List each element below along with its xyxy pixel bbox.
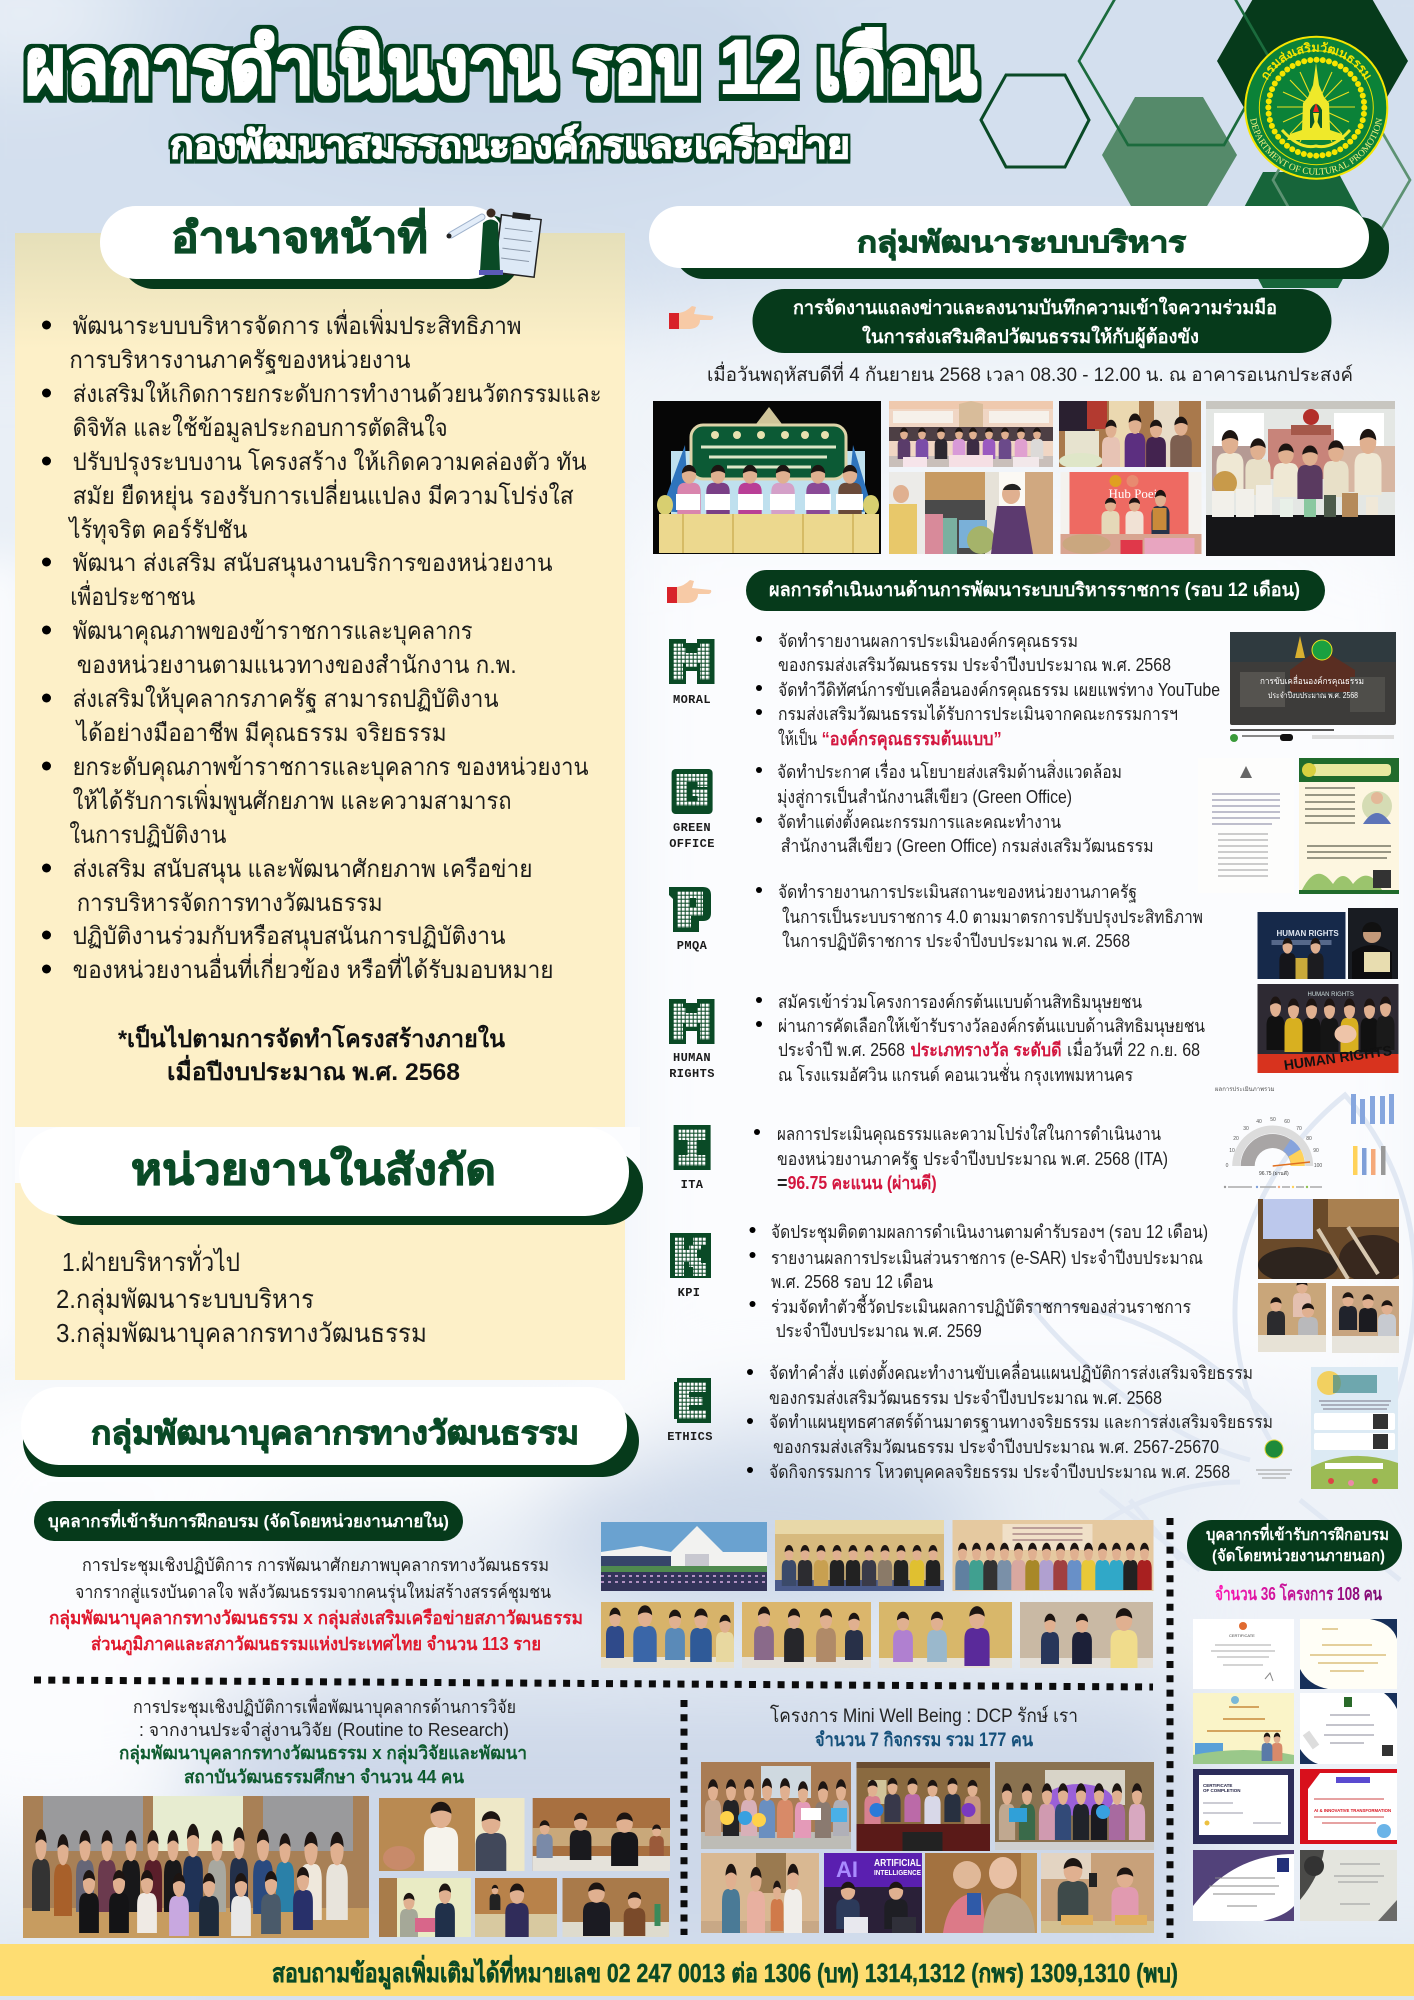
photo: research group portrait — [23, 1796, 369, 1938]
icon: I — [674, 1125, 711, 1170]
text: MORAL items: ให้เป็น — [778, 727, 817, 749]
callout: results heading — [746, 570, 1325, 611]
photo: man and woman at table — [562, 1878, 669, 1937]
note: structure — [118, 1024, 506, 1086]
list: duties: พัฒนาคุณภาพของข้าราชการและบุคลากร — [73, 618, 473, 646]
list: duties: ส่งเสริมให้เกิดการยกระดับการทำงานด้วยนวัตกรรมและ — [73, 380, 602, 408]
section: ETHICS: ETHICS — [667, 1430, 713, 1444]
list: duties: ของหน่วยงานอื่นที่เกี่ยวข้อง หรือที่ได้รับมอบหมาย — [73, 953, 554, 984]
certificate: three — [1193, 1693, 1294, 1764]
callout: MOU heading — [752, 289, 1332, 353]
list: duties: การบริหารงานภาครัฐของหน่วยงาน — [69, 347, 410, 374]
section: MORAL — [669, 631, 1396, 751]
text: mini well being: จำนวน 7 กิจกรรม รวม 177 คน — [815, 1730, 1033, 1751]
photo: mug selfie — [925, 1853, 1037, 1933]
text: human rights items: ผ่านการคัดเลือกให้เข้ารับรางวัลองค์กรต้นแบบด้านสิทธิมนุษยชน — [778, 1015, 1205, 1037]
text: ethics items: จัดทำคำสั่ง แต่งตั้งคณะทำงานขับเคลื่อนแผนปฏิบัติการส่งเสริมจริยธรรม — [769, 1360, 1253, 1383]
text: research workshop — [119, 1694, 527, 1787]
section: GREEN OFFICE: OFFICE — [669, 837, 715, 851]
note: structure: เมื่อปีงบประมาณ พ.ศ. 2568 — [167, 1054, 460, 1086]
certificate: five: CERTIFICATE — [1203, 1783, 1232, 1788]
photo: phone and presenters — [1041, 1853, 1154, 1933]
callout: external training heading — [1187, 1520, 1402, 1571]
text: green items — [777, 759, 1154, 856]
section: HUMAN RIGHTS: RIGHTS — [669, 1067, 715, 1081]
text: research workshop: การประชุมเชิงปฏิบัติการเพื่อพัฒนาบุคลากรด้านการวิจัย — [133, 1694, 516, 1718]
photo: well being standing — [701, 1853, 819, 1933]
photo: speakers — [379, 1798, 524, 1871]
certificate: one: CERTIFICATE — [1229, 1633, 1255, 1638]
photo: certificate holder — [1348, 908, 1398, 979]
icon: E — [674, 1378, 711, 1423]
heading: admin group: กลุ่มพัฒนาระบบบริหาร — [857, 227, 1186, 260]
list: duties: ปฏิบัติงานร่วมกับหรือสนุบสนันการปฏิบัติงาน — [73, 923, 506, 951]
text: ethics items: ของกรมส่งเสริมวัฒนธรรม ประจำปีงบประมาณ พ.ศ. 2567-25670 — [773, 1437, 1219, 1457]
text: KPI items: จัดประชุมติดตามผลการดำเนินงานตามคำรับรองฯ (รอบ 12 เดือน) — [771, 1222, 1208, 1243]
text: MORAL items: “องค์กรคุณธรรมต้นแบบ” — [822, 728, 1002, 751]
section: ETHICS — [667, 1360, 1398, 1489]
chart: gauge: 10 — [1229, 1148, 1235, 1154]
chart: ITA gauge and bars — [1215, 1086, 1394, 1188]
text: internal training description — [49, 1555, 583, 1656]
list: sub-units: 2.กลุ่มพัฒนาระบบบริหาร — [56, 1284, 314, 1315]
icon: pointing hand 2 — [667, 580, 711, 603]
decorative flower watermark — [1030, 1095, 1414, 1580]
text: internal training description: จากรากสู่แรงบันดาลใจ พลังวัฒนธรรมจากคนรุ่นใหม่สร้างสรรค์ชุมชน — [75, 1581, 551, 1603]
photo: seminar row one — [601, 1602, 734, 1668]
photo: AI workshop: AI — [836, 1857, 858, 1882]
heading: duties: อำนาจหน้าที่ — [171, 208, 428, 261]
photo: audience — [889, 401, 1053, 467]
text: PMQA items: ในการเป็นระบบราชการ 4.0 ตามมาตรการปรับปรุงประสิทธิภาพ — [782, 905, 1203, 928]
list: duties: ดิจิทัล และใช้ข้อมูลประกอบการตัดสินใจ — [73, 414, 448, 443]
heading: sub-units — [19, 1127, 643, 1225]
section: KPI — [670, 1199, 1407, 1353]
section: PMQA: PMQA — [677, 939, 708, 953]
list: duties: ส่งเสริมให้บุคลากรภาครัฐ สามารถปฏิบัติงาน — [73, 685, 499, 714]
text: green items: จัดทำประกาศ เรื่อง นโยบายส่งเสริมด้านสิ่งแวดล้อม — [777, 759, 1122, 782]
photo: hall group — [775, 1520, 944, 1591]
list: duties: ส่งเสริม สนับสนุน และพัฒนาศักยภาพ เครือข่าย — [73, 856, 533, 884]
text: green items: จัดทำแต่งตั้งคณะกรรมการและคณะทำงาน — [777, 809, 1061, 832]
callout: internal training heading — [34, 1501, 463, 1541]
photo: fabric shop — [889, 472, 1053, 554]
chart: gauge: 30 — [1243, 1126, 1249, 1132]
chart: gauge: 90 — [1313, 1148, 1319, 1154]
logo: department seal: DEPARTMENT OF CULTURAL PROMOTION — [1250, 118, 1382, 175]
decorative dotted dividers — [34, 1518, 1170, 1938]
text: KPI items: ประจำปีงบประมาณ พ.ศ. 2569 — [776, 1321, 982, 1341]
callout: internal training heading: บุคลากรที่เข้ารับการฝึกอบรม (จัดโดยหน่วยงานภายใน) — [48, 1509, 449, 1532]
certificate: six: AI & INNOVATIVE TRANSFORMATION — [1314, 1808, 1391, 1813]
text: ITA items: = — [777, 1173, 788, 1193]
chart: gauge: 80 — [1306, 1136, 1312, 1142]
text: KPI items: พ.ศ. 2568 รอบ 12 เดือน — [771, 1272, 933, 1292]
icon: P — [669, 887, 711, 932]
heading: cultural personnel group: กลุ่มพัฒนาบุคลากรทางวัฒนธรรม — [91, 1415, 579, 1454]
hexagon decorations — [981, 0, 1410, 288]
text: event date: เมื่อวันพฤหัสบดีที่ 4 กันยายน 2568 เวลา 08.30 - 12.00 น. ณ อาคารอเนกประสงค์ — [707, 361, 1353, 386]
section: HUMAN RIGHTS: HUMAN — [673, 1051, 711, 1065]
text: mini well being: โครงการ Mini Well Being : DCP รักษ์ เรา — [770, 1704, 1078, 1727]
text: human rights items: สมัครเข้าร่วมโครงการองค์กรต้นแบบด้านสิทธิมนุษยชน — [778, 991, 1142, 1013]
callout: external training heading: บุคลากรที่เข้ารับการฝึกอบรม — [1206, 1523, 1389, 1545]
text: internal training description: การประชุมเชิงปฏิบัติการ การพัฒนาศักยภาพบุคลากรทางวัฒนธรรม — [82, 1555, 549, 1576]
list: duties: ไร้ทุจริต คอร์รัปชัน — [68, 516, 247, 545]
chart: gauge: 40 — [1256, 1119, 1262, 1125]
footer bar — [0, 1944, 1414, 1996]
photo: well being group one — [701, 1762, 851, 1849]
icon: person with clipboard — [446, 208, 542, 277]
text: MORAL items: ของกรมส่งเสริมวัฒนธรรม ประจำปีงบประมาณ พ.ศ. 2568 — [778, 655, 1171, 675]
certificate: six — [1300, 1769, 1397, 1844]
photo: signing ceremony — [653, 401, 881, 554]
certificate: five — [1193, 1769, 1294, 1844]
photo: meeting table one — [1258, 1283, 1326, 1352]
photo: human rights award group: HUMAN RIGHTS — [1283, 1042, 1393, 1073]
photo: seminar row three — [879, 1602, 1012, 1668]
certificate: four — [1300, 1693, 1397, 1764]
text: ITA items — [777, 1123, 1168, 1193]
hexagon: bright green — [1232, 172, 1369, 288]
text: research workshop: : จากงานประจำสู่งานวิจัย (Routine to Research) — [139, 1720, 509, 1741]
certificate: five: OF COMPLETION — [1203, 1788, 1240, 1793]
heading: admin group — [649, 206, 1389, 279]
photo: meeting table two — [1332, 1286, 1399, 1353]
icon: small seal — [1256, 1440, 1292, 1478]
chart: ITA gauge and bars: ผลการประเมินภาพรวม — [1215, 1086, 1275, 1093]
photo: well being group three — [995, 1762, 1154, 1850]
text: MORAL items: จัดทำวีดิทัศน์การขับเคลื่อนองค์กรคุณธรรม เผยแพร่ทาง YouTube — [778, 677, 1220, 701]
text: MORAL items: จัดทำรายงานผลการประเมินองค์กรคุณธรรม — [778, 631, 1078, 652]
subtitle: กองพัฒนาสมรรถนะองค์กรและเครือข่าย — [170, 124, 850, 167]
certificate: two — [1300, 1619, 1397, 1689]
photo: award on stage — [1258, 912, 1346, 979]
icon: M human rights — [669, 999, 714, 1044]
section: KPI: KPI — [678, 1286, 700, 1300]
photo: presentation of gift — [379, 1878, 471, 1937]
text: MORAL items: กรมส่งเสริมวัฒนธรรมได้รับการประเมินจากคณะกรรมการฯ — [778, 703, 1178, 724]
image: moral video thumbnail: การขับเคลื่อนองค์กรคุณธรรม — [1260, 674, 1364, 687]
list: duties: ของหน่วยงานตามแนวทางของสำนักงาน ก.พ. — [77, 652, 517, 679]
photo: human rights award group — [1258, 984, 1398, 1073]
text: PMQA items: จัดทำรายงานการประเมินสถานะของหน่วยงานภาครัฐ — [778, 882, 1137, 903]
chart: gauge: 60 — [1284, 1119, 1290, 1125]
list: duties: ในการปฏิบัติงาน — [69, 821, 226, 849]
hexagon: thin outline large — [1079, 0, 1271, 145]
panel: sub-units — [15, 1127, 643, 1380]
list: duties: พัฒนาระบบบริหารจัดการ เพื่อเพิ่มประสิทธิภาพ — [73, 309, 522, 340]
text: MORAL items — [778, 631, 1220, 751]
title: ผลการดำเนินงาน รอบ 12 เดือน — [25, 25, 977, 110]
hexagon: medium green — [1102, 97, 1237, 213]
photo: participants — [532, 1798, 670, 1871]
text: mini well being — [770, 1704, 1078, 1751]
note: structure: *เป็นไปตามการจัดทำโครงสร้างภายใน — [118, 1024, 506, 1053]
image: moral video thumbnail: ประจำปีงบประมาณ พ.ศ. 2568 — [1268, 691, 1358, 700]
photo: well being group two — [856, 1762, 990, 1851]
chart: gauge: 96.75 (ผ่านดี) — [1259, 1170, 1289, 1177]
footer bar: สอบถามข้อมูลเพิ่มเติมได้ที่หมายเลข 02 247 0013 ต่อ 1306 (บท) 1314,1312 (กพร) 1309,1310 (พบ) — [272, 1954, 1178, 1990]
list: duties: ยกระดับคุณภาพข้าราชการและบุคลากร ของหน่วยงาน — [73, 754, 589, 782]
photo: human rights award group: HUMAN RIGHTS — [1308, 992, 1354, 998]
list: duties: ได้อย่างมืออาชีพ มีคุณธรรม จริยธรรม — [75, 719, 447, 748]
heading: cultural personnel group — [21, 1387, 639, 1477]
list: duties: ปรับปรุงระบบงาน โครงสร้าง ให้เกิดความคล่องตัว ทัน — [73, 448, 587, 477]
certificate: eight — [1300, 1850, 1397, 1921]
chart: gauge: 0 — [1226, 1163, 1229, 1169]
heading: duties — [100, 206, 521, 289]
heading: sub-units: หน่วยงานในสังกัด — [131, 1145, 496, 1193]
callout: results heading: ผลการดำเนินงานด้านการพัฒนาระบบบริหารราชการ (รอบ 12 เดือน) — [769, 579, 1300, 601]
text: ethics items: จัดกิจกรรมการ โหวตบุคคลจริยธรรม ประจำปีงบประมาณ พ.ศ. 2568 — [769, 1461, 1230, 1483]
list: duties: การบริหารจัดการทางวัฒนธรรม — [77, 890, 383, 917]
text: research workshop: กลุ่มพัฒนาบุคลากรทางวัฒนธรรม x กลุ่มวิจัยและพัฒนา — [119, 1743, 527, 1765]
text: KPI items: ร่วมจัดทำตัวชี้วัดประเมินผลการปฏิบัติราชการของส่วนราชการ — [771, 1294, 1191, 1317]
chart: gauge: 70 — [1296, 1126, 1302, 1132]
chart: gauge: 20 — [1233, 1136, 1239, 1142]
list: duties: พัฒนา ส่งเสริม สนับสนุนงานบริการของหน่วยงาน — [73, 550, 553, 578]
image: green office announcement — [1212, 766, 1280, 877]
section: GREEN OFFICE — [669, 758, 1399, 894]
list: duties: สมัย ยืดหยุ่น รองรับการเปลี่ยนแปลง มีความโปร่งใส — [73, 479, 574, 511]
text: ITA items: 96.75 คะแนน (ผ่านดี) — [788, 1173, 937, 1193]
photo: building and crowd — [601, 1522, 767, 1591]
text: research workshop: สถาบันวัฒนธรรมศึกษา จำนวน 44 คน — [184, 1767, 465, 1787]
chart: coloured bars — [1353, 1146, 1386, 1175]
icon: M — [669, 639, 714, 684]
section: MORAL: MORAL — [673, 693, 711, 707]
callout: MOU heading: ในการส่งเสริมศิลปวัฒนธรรมให้กับผู้ต้องขัง — [862, 325, 1199, 349]
section: ITA — [674, 1086, 1394, 1193]
photo: Hub Poei booth — [1060, 472, 1202, 554]
section: PMQA — [669, 882, 1203, 953]
chart: gauge: 50 — [1270, 1117, 1276, 1123]
chart: blue bars — [1351, 1094, 1394, 1124]
text: green items: มุ่งสู่การเป็นสำนักงานสีเขียว (Green Office) — [777, 785, 1072, 808]
photo: seminar row two — [742, 1602, 871, 1668]
text: ethics items — [769, 1360, 1273, 1483]
icon: K — [670, 1233, 711, 1278]
text: internal training description: ส่วนภูมิภาคและสภาวัฒนธรรมแห่งประเทศไทย จำนวน 113 ราย — [91, 1633, 541, 1656]
list: sub-units: 1.ฝ่ายบริหารทั่วไป — [62, 1244, 240, 1277]
list: duties: ให้ได้รับการเพิ่มพูนศักยภาพ และความสามารถ — [73, 784, 512, 816]
hexagon: thin outline right — [1273, 120, 1410, 240]
photo: meeting room — [1258, 1199, 1399, 1279]
text: human rights items: ณ โรงแรมอัศวิน แกรนด์ คอนเวนชั่น กรุงเทพมหานคร — [778, 1062, 1133, 1086]
text: ethics items: จัดทำแผนยุทธศาสตร์ด้านมาตรฐานทางจริยธรรม และการส่งเสริมจริยธรรม — [769, 1412, 1273, 1433]
logo: department seal: กรมส่งเสริมวัฒนธรรม — [1262, 42, 1371, 80]
hexagon: dark top right — [1217, 0, 1408, 144]
text: internal training description: กลุ่มพัฒนาบุคลากรทางวัฒนธรรม x กลุ่มส่งเสริมเครือข่ายสภาวัฒนธรรม — [49, 1608, 583, 1630]
text: KPI items: รายงานผลการประเมินส่วนราชการ (e-SAR) ประจำปีงบประมาณ — [771, 1248, 1203, 1268]
section: HUMAN RIGHTS — [669, 908, 1398, 1086]
text: ITA items: ของหน่วยงานภาครัฐ ประจำปีงบประมาณ พ.ศ. 2568 (ITA) — [777, 1149, 1168, 1170]
logo: department seal — [1244, 36, 1388, 180]
text: human rights items: ประเภทรางวัล ระดับดี — [910, 1040, 1062, 1060]
text: human rights items: เมื่อวันที่ 22 ก.ย. 68 — [1067, 1037, 1200, 1060]
photo: group with products — [1206, 401, 1395, 556]
text: human rights items: ประจำปี พ.ศ. 2568 — [778, 1040, 905, 1060]
text: green items: สำนักงานสีเขียว (Green Office) กรมส่งเสริมวัฒนธรรม — [781, 836, 1154, 856]
photo: formal line-up — [952, 1520, 1154, 1591]
text: PMQA items: ในการปฏิบัติราชการ ประจำปีงบประมาณ พ.ศ. 2568 — [782, 930, 1130, 951]
text: KPI items — [771, 1222, 1208, 1341]
photo: woman at table — [475, 1878, 557, 1937]
icon: G — [672, 769, 713, 814]
text: ITA items: ผลการประเมินคุณธรรมและความโปร่งใสในการดำเนินงาน — [777, 1123, 1161, 1145]
callout: MOU heading: การจัดงานแถลงข่าวและลงนามบันทึกความเข้าใจความร่วมมือ — [793, 296, 1277, 319]
hexagon: small outline — [981, 75, 1089, 167]
text: PMQA items — [778, 882, 1203, 951]
photo: AI workshop — [824, 1853, 922, 1933]
chart: gauge — [1224, 1117, 1322, 1188]
panel: duties — [15, 206, 625, 1127]
photo: award on stage: HUMAN RIGHTS — [1276, 929, 1339, 938]
image: ethics poster — [1311, 1367, 1398, 1489]
text: human rights items — [778, 991, 1205, 1086]
photo: Hub Poei booth: Hub Poei — [1108, 486, 1158, 501]
section: GREEN OFFICE: GREEN — [673, 821, 711, 835]
image: moral video thumbnail — [1230, 632, 1396, 742]
section: ITA: ITA — [681, 1178, 704, 1192]
certificate: seven — [1193, 1850, 1294, 1921]
text: ethics items: ของกรมส่งเสริมวัฒนธรรม ประจำปีงบประมาณ พ.ศ. 2568 — [769, 1388, 1162, 1408]
certificate: one — [1193, 1619, 1294, 1689]
icon: pointing hand 1 — [669, 306, 713, 329]
chart: gauge: 100 — [1314, 1163, 1322, 1169]
photo: clothing display — [1059, 401, 1201, 467]
list: duties: เพื่อประชาชน — [70, 580, 195, 611]
callout: external training heading: (จัดโดยหน่วยงานภายนอก) — [1212, 1545, 1385, 1565]
list: sub-units: 3.กลุ่มพัฒนาบุคลากรทางวัฒนธรรม — [56, 1318, 427, 1349]
image: green office poster — [1299, 758, 1399, 894]
list: duties — [42, 309, 602, 984]
photo: seminar row four — [1020, 1602, 1153, 1668]
list: sub-units — [56, 1244, 427, 1349]
